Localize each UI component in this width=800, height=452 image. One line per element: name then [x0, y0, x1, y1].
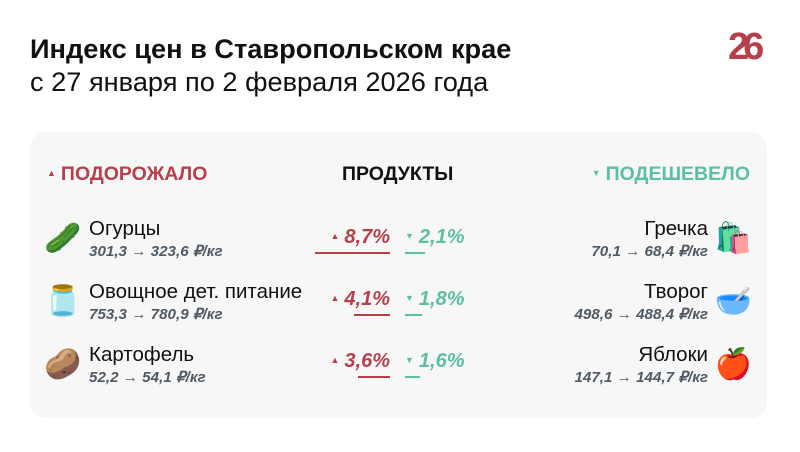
title: Индекс цен в Ставропольском крае [30, 33, 511, 64]
row 1 right: 70,1 → 68,4 ₽/кг [591, 243, 708, 260]
change values row 3 [330, 350, 465, 378]
header: down: ▼ ПОДЕШЕВЕЛО [592, 163, 750, 185]
row 3 left: 52,2 → 54,1 ₽/кг [89, 369, 206, 386]
row 1 left: 301,3 → 323,6 ₽/кг [89, 243, 223, 260]
row 2 left: 753,3 → 780,9 ₽/кг [89, 306, 223, 323]
row 3 left [44, 343, 206, 386]
row 3 left: Картофель [89, 343, 194, 366]
subtitle: с 27 января по 2 февраля 2026 года [30, 66, 488, 97]
logo: 26 [728, 26, 758, 68]
row 3 left: 🥔 [44, 348, 81, 381]
row 2 left: 🫙 [44, 285, 81, 318]
row 3 right: Яблоки [638, 343, 708, 366]
row 1 right: Гречка [644, 217, 708, 240]
row 1 left [44, 217, 223, 260]
row 1 left: 🥒 [44, 222, 81, 255]
change values row 3: ▲3,6% [330, 350, 390, 372]
row 3 right: 🍎 [715, 348, 752, 381]
change values row 2 [330, 288, 465, 316]
row 2 left: Овощное дет. питание [89, 280, 302, 303]
panel [30, 132, 767, 418]
row 2 right: Творог [644, 280, 708, 303]
change values row 2: ▲4,1% [330, 288, 390, 310]
header: up: ▲ ПОДОРОЖАЛО [47, 163, 207, 185]
row 2 right: 498,6 → 488,4 ₽/кг [574, 306, 708, 323]
change values row 1: ▲8,7% [330, 226, 390, 248]
change values row 1 [315, 226, 465, 254]
change values row 3: ▼1,6% [405, 350, 465, 372]
header: products: ПРОДУКТЫ [342, 163, 453, 185]
row 1 right [591, 217, 752, 260]
change values row 1: ▼2,1% [405, 226, 465, 248]
row 3 right: 147,1 → 144,7 ₽/кг [574, 369, 708, 386]
change values row 2: ▼1,8% [405, 288, 465, 310]
row 1 right: 🛍️ [715, 222, 752, 255]
row 2 right: 🥣 [715, 285, 752, 318]
row 3 right [574, 343, 752, 386]
row 1 left: Огурцы [89, 217, 160, 240]
row 2 left [44, 280, 302, 323]
row 2 right [574, 280, 752, 323]
